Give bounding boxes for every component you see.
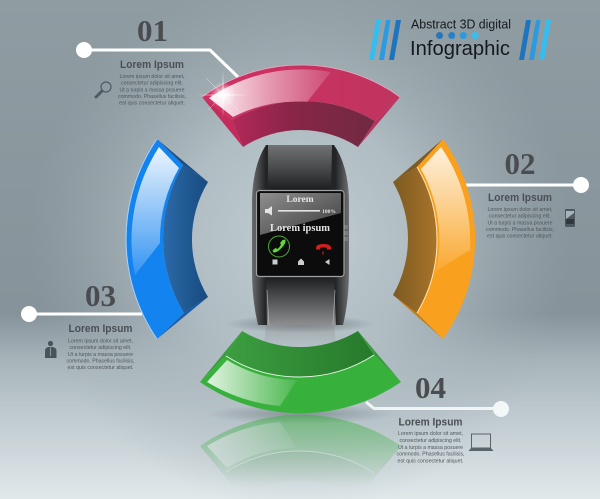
body 02: Ut a turpis a massa posuere [488,220,552,226]
watch bottom strap [266,277,336,325]
orange gloss [421,147,470,271]
nav icons [272,258,330,265]
panel: item 04 text [396,370,465,464]
number 04: 04 [415,370,446,405]
number 02: 02 [504,146,536,181]
green right face [358,331,401,382]
right title stripes [519,20,551,60]
segment 02: orange [393,139,475,339]
floor shadow: green segment [205,404,395,424]
title line one: Abstract 3D digital [411,16,511,32]
title line two: Infographic [410,38,510,60]
orange bottom face [393,295,443,339]
blue top face [157,139,208,182]
body 04: est quis consectetur aliquet. [398,458,464,464]
watch reflection [265,325,336,340]
body 03: Ut a turpis a massa posuere [68,352,133,358]
pink rim [202,65,400,97]
sparkle [197,70,250,118]
green top face [226,331,374,377]
body 03: commodo. Phasellus facilisis, [66,358,135,364]
pink gloss [209,69,331,117]
segment 01: pink [202,65,400,147]
blue side face [163,165,208,313]
body 01: est quis consectetur aliquet. [119,101,185,107]
body 02 [486,207,554,240]
body 04: Lorem ipsum dolor sit amet, [398,431,463,437]
body 01: Lorem ipsum dolor sit amet, [120,74,185,80]
volume label: 100% [322,209,336,215]
orange front face [417,139,475,339]
watch side buttons [344,225,348,241]
body 02: est quis consectetur aliquet. [487,234,553,240]
watch strap highlights [267,290,335,325]
green segment reflection [200,414,401,480]
heading 03: Lorem Ipsum [68,323,133,335]
pink right face [358,97,400,147]
body 04: consectetur adipiscing elit. [400,438,462,444]
panel: item 01 text [118,13,186,107]
watch strap back [252,145,349,325]
watch screen glare [260,193,341,235]
segment 03: blue [126,139,208,339]
segment 04: green [200,331,401,413]
orange side face [393,167,437,313]
title block [369,16,551,60]
green gloss [207,360,297,406]
body 04: commodo. Phasellus facilisis, [396,452,465,458]
number 03: 03 [85,278,116,313]
title dots [436,32,478,39]
body 04: Ut a turpis a massa posuere [398,445,463,451]
pink front face [202,65,400,121]
blue rim [126,139,157,339]
blue front face [126,139,184,339]
icon: green call [268,236,290,257]
body 03: Lorem ipsum dolor sit amet, [68,338,133,344]
connector lines [21,42,589,417]
green rim [226,355,374,377]
icon: smartphone [565,209,575,227]
panel: item 02 text [486,146,554,240]
blue gloss [131,147,179,275]
body 02: consectetur adipiscing elit. [489,214,551,220]
body 02: commodo. Phasellus facilisis, [486,227,554,233]
number 01: 01 [137,13,168,48]
body 03: est quis consectetur aliquet. [68,365,134,371]
screen subtitle: Lorem ipsum [270,223,331,234]
orange inner rim [417,167,437,313]
blue bottom face [157,297,208,339]
pink left face [202,97,243,147]
pink side face [232,101,375,147]
green left face [200,331,242,382]
body 02: Lorem ipsum dolor sit amet, [488,207,553,213]
body 01: consectetur adipiscing elit. [121,81,183,87]
floor shadow: watch [225,315,375,333]
screen title: Lorem [286,195,314,205]
body 04 [396,431,465,464]
icon: red hang-up: x [322,250,325,256]
watch bezel [256,190,344,276]
icon: speaker [265,206,272,216]
icon: person [45,341,56,358]
volume slider [278,210,320,212]
watch top strap [268,145,332,190]
icon: laptop [468,434,494,451]
icon: magnifier [96,82,111,97]
body 03 [66,338,135,371]
heading 01: Lorem Ipsum [120,59,184,71]
body 01: commodo. Phasellus facilisis, [118,94,186,100]
body 03: consectetur adipiscing elit. [70,345,132,351]
orange top face [393,139,443,182]
left title stripes [369,20,401,60]
panel: item 03 text [66,278,135,371]
body 01 [118,74,186,107]
icon: red hang-up [316,244,331,256]
green front face [200,355,401,413]
heading 02: Lorem Ipsum [488,192,552,204]
smartwatch [252,145,349,325]
body 01: Ut a turpis a massa posuere [120,87,184,93]
heading 04: Lorem Ipsum [398,416,463,428]
